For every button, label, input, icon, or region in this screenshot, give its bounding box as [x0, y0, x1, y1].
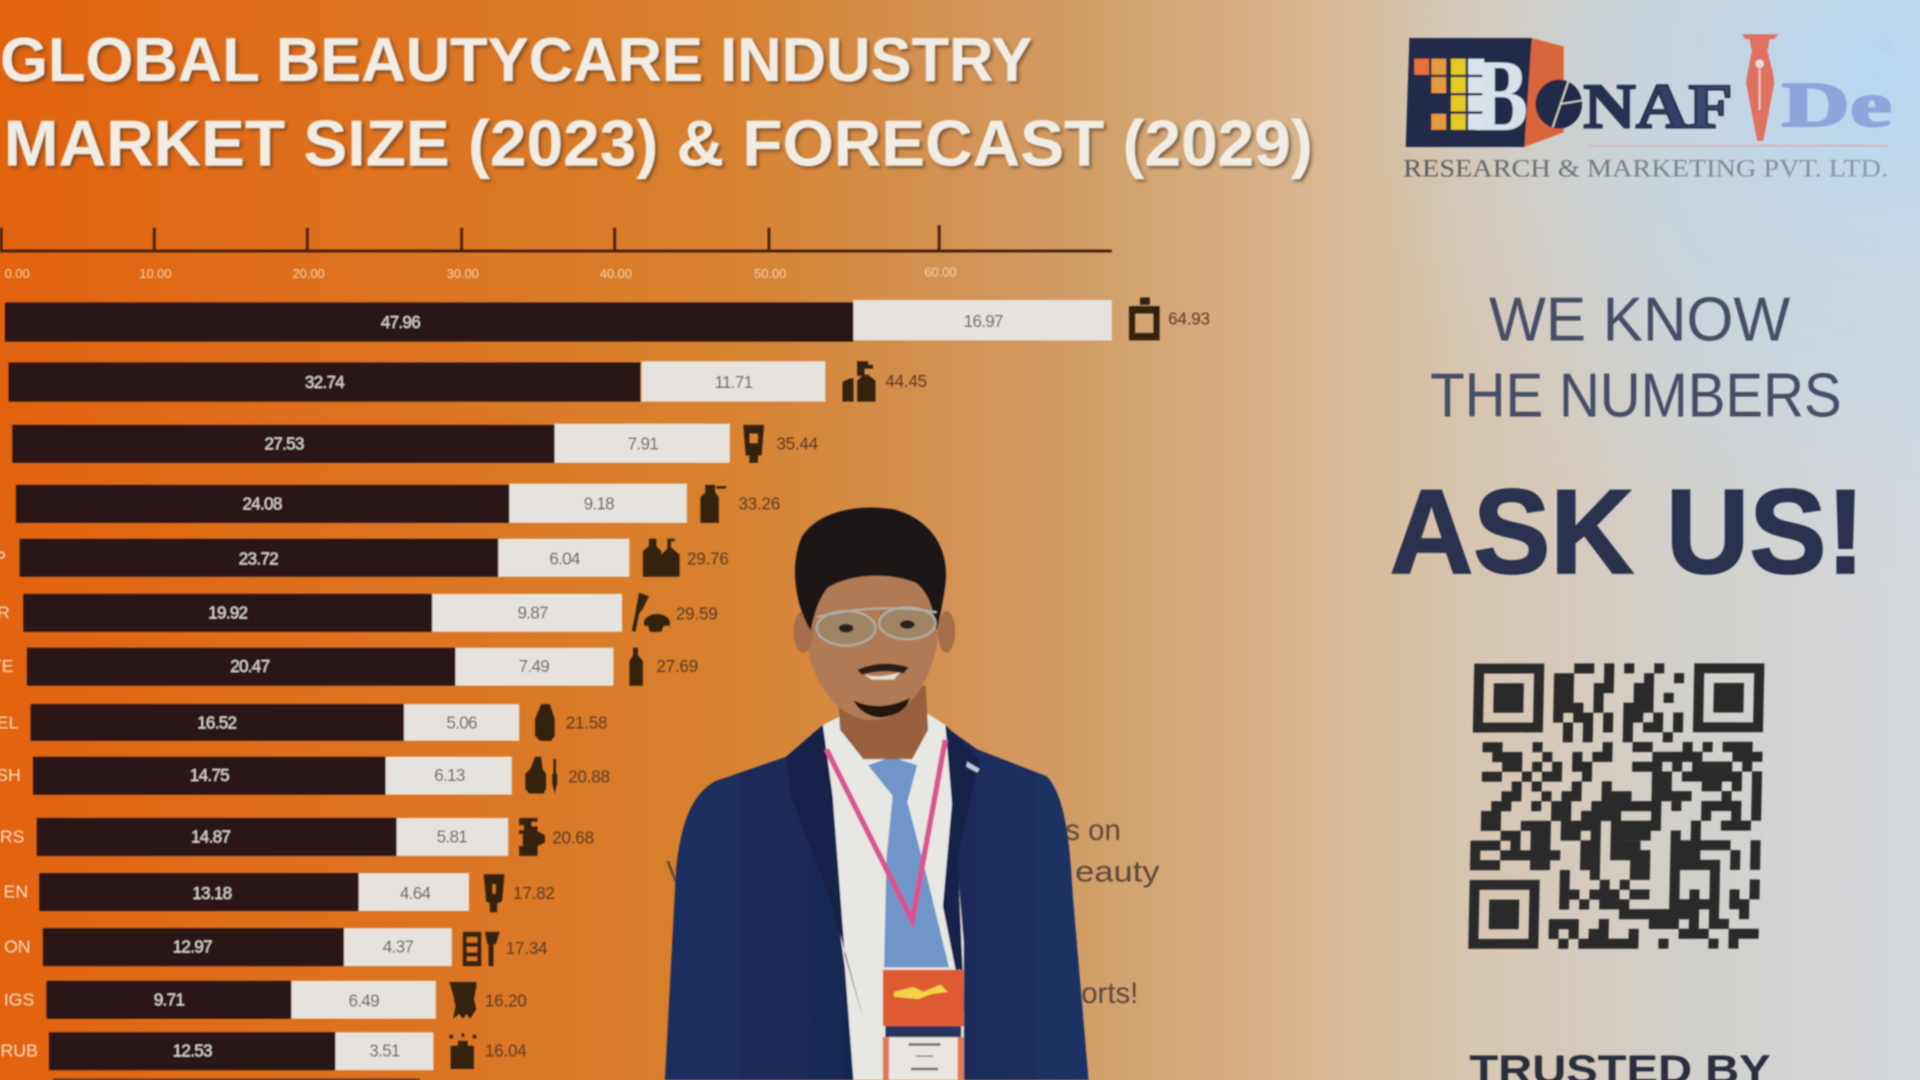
- axis: 40.00: [600, 266, 632, 281]
- row 12 bar: 12.97: [173, 937, 212, 957]
- row 3 bar: 7.91: [628, 433, 658, 453]
- row 1 bar: [5, 300, 1210, 342]
- icon: palette and brush: [463, 932, 500, 966]
- icon: gel bottle: [535, 704, 555, 741]
- icon: tube: [743, 425, 764, 463]
- icon: slim bottle: [629, 648, 643, 686]
- row 11 bar: 17.82: [513, 883, 555, 903]
- icon: scrub jar: [449, 1033, 476, 1069]
- hidden slogan fragments: V: [666, 856, 686, 889]
- title: MARKET SIZE (2023) & FORECAST (2029): [4, 106, 1313, 179]
- row 2 bar: 11.71: [715, 372, 753, 392]
- row 6 bar: [0, 594, 718, 632]
- row 10 bar: 14.87: [191, 826, 230, 846]
- slogan: we know the numbers: THE NUMBERS: [1430, 360, 1842, 430]
- eyes: [839, 620, 915, 632]
- person in suit: [665, 507, 1089, 1080]
- row 7 bar: 7.49: [519, 656, 549, 676]
- row 13 bar: [4, 981, 527, 1019]
- row 10 bar: 20.68: [552, 828, 594, 848]
- row 5 bar: 6.04: [549, 548, 581, 568]
- logo mark: [1406, 38, 1564, 153]
- row 6 bar: 29.59: [676, 604, 718, 624]
- axis: [0, 225, 1112, 281]
- row 12 bar: 4.37: [383, 937, 413, 957]
- stacked bar chart: [0, 300, 1210, 1080]
- logo mark: B: [1474, 39, 1528, 153]
- slogan: ask us: ASK US!: [1390, 465, 1865, 599]
- logo wordmark: De: [1782, 69, 1892, 140]
- row 11 bar: 13.18: [192, 883, 232, 903]
- badge: [883, 970, 964, 1080]
- icon: pen nib: [1742, 34, 1778, 141]
- row 8 bar: [0, 704, 607, 741]
- logo wordmark: ®: [1880, 37, 1892, 54]
- row 2 bar: 32.74: [305, 372, 345, 392]
- icon: two bottles: [643, 539, 680, 577]
- shirt: [823, 708, 964, 1080]
- lapel pin: [966, 762, 980, 773]
- axis: 0.00: [5, 266, 30, 281]
- row 9 bar: 14.75: [190, 765, 229, 785]
- row 4 bar: 33.26: [738, 493, 780, 513]
- lanyard: [827, 740, 945, 921]
- row 5 bar: 23.72: [239, 548, 278, 568]
- row 11 bar: [3, 873, 555, 911]
- row 12 bar: ON: [4, 937, 31, 957]
- jacket: [665, 725, 1089, 1080]
- hidden slogan fragments: orts!: [1081, 977, 1138, 1010]
- row 13 bar: 16.20: [485, 991, 527, 1011]
- row 1 bar: 16.97: [964, 311, 1003, 331]
- row 2 bar: 44.45: [885, 371, 927, 391]
- row 5 bar: 29.76: [687, 548, 729, 568]
- row 1 bar: 64.93: [1168, 308, 1210, 328]
- row 2 bar: [9, 361, 927, 402]
- row 9 bar: 20.88: [568, 766, 610, 786]
- title: GLOBAL BEAUTYCARE INDUSTRY: [0, 25, 1032, 95]
- row 10 bar: 5.81: [437, 826, 467, 846]
- row 11 bar: 4.64: [400, 883, 432, 903]
- row 9 bar: [0, 757, 610, 795]
- hidden slogan fragments: [666, 814, 1160, 1010]
- hidden slogan fragments: s on: [1065, 814, 1121, 847]
- axis: 30.00: [447, 266, 479, 281]
- neck: [838, 686, 928, 759]
- axis: 10.00: [139, 266, 172, 281]
- row 14 bar: 12.53: [173, 1041, 212, 1061]
- icon: pump bottles: [842, 361, 876, 402]
- icon: wig: [449, 982, 476, 1019]
- row 12 bar: [4, 928, 548, 966]
- row 14 bar: RUB: [0, 1041, 38, 1061]
- hair: [795, 507, 946, 631]
- tie: [868, 757, 949, 967]
- row 3 bar: 27.53: [264, 433, 304, 453]
- row 4 bar: [16, 484, 780, 523]
- icon: brush and bowl: [632, 593, 670, 632]
- lapel shading: [786, 725, 980, 1019]
- axis: 50.00: [754, 266, 786, 281]
- hidden slogan fragments: eauty: [1075, 856, 1160, 889]
- icon: perfume box: [1129, 298, 1160, 340]
- slogan: we know the numbers: WE KNOW: [1489, 284, 1790, 354]
- axis: 20.00: [292, 266, 325, 281]
- row 6 bar: 19.92: [208, 602, 248, 622]
- row 7 bar: 27.69: [656, 656, 698, 676]
- row 6 bar: 9.87: [517, 602, 548, 622]
- row 8 bar: 21.58: [566, 713, 607, 733]
- row 3 bar: [12, 424, 819, 463]
- icon: nail polish: [525, 757, 557, 793]
- icon: sunscreen tube: [484, 874, 504, 912]
- QR code: [1468, 663, 1764, 949]
- row 13 bar: IGS: [4, 989, 34, 1009]
- row 10 bar: RS: [0, 826, 25, 846]
- row 12 bar: 17.34: [506, 938, 548, 958]
- row 11 bar: EN: [3, 882, 28, 902]
- icon: hair dryer stack: [519, 818, 545, 856]
- title: [0, 25, 1313, 179]
- row 5 bar: [0, 539, 729, 577]
- row 13 bar: 6.49: [348, 991, 379, 1011]
- mouth and beard: [853, 664, 910, 718]
- row 4 bar: 24.08: [242, 493, 282, 513]
- glasses: [817, 607, 937, 645]
- slogan: we know the numbers: [1430, 284, 1842, 430]
- axis: 60.00: [924, 265, 956, 280]
- row 14 bar: 3.51: [369, 1041, 400, 1061]
- row 4 bar: 9.18: [584, 493, 614, 513]
- row 7 bar: 20.47: [230, 656, 270, 676]
- row 14 bar: 16.04: [485, 1041, 527, 1061]
- row 1 bar: 47.96: [381, 312, 420, 332]
- row 8 bar: 5.06: [446, 713, 477, 733]
- row 15 bar cut off: [53, 1079, 420, 1080]
- product icons: [449, 298, 1160, 1069]
- head: [804, 517, 939, 720]
- row 9 bar: 6.13: [434, 765, 465, 785]
- logo wordmark: NAF: [1583, 70, 1733, 141]
- logo wordmark: [1403, 37, 1892, 182]
- icon: serum bottle: [700, 485, 726, 523]
- row 14 bar: [0, 1032, 527, 1070]
- row 7 bar: [0, 648, 698, 686]
- row 10 bar: [0, 818, 594, 856]
- logo: [1403, 34, 1892, 182]
- row 8 bar: 16.52: [197, 713, 237, 733]
- row 3 bar: 35.44: [776, 433, 819, 453]
- row 13 bar: 9.71: [154, 989, 184, 1009]
- ears: [793, 611, 955, 653]
- logo wordmark: RESEARCH & MARKETING PVT. LTD.: [1403, 153, 1888, 182]
